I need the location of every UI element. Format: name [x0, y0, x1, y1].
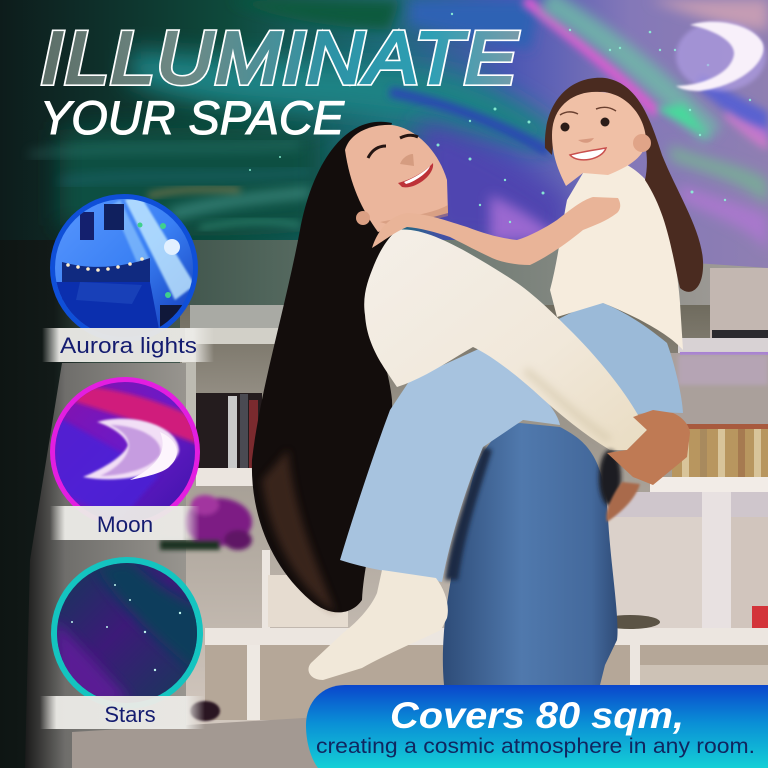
- label band: Stars: [40, 696, 205, 729]
- aurora ceiling: [0, 0, 768, 268]
- label: Moon: Moon: [97, 512, 153, 537]
- woman's hair brown tips: [262, 450, 335, 612]
- dark shadow by hand: [599, 450, 621, 506]
- woman's hand: [606, 410, 690, 522]
- label: Stars: Stars: [104, 702, 156, 727]
- title: ILLUMINATE: ILLUMINATE: [41, 18, 519, 99]
- icon: aurora room circle: [50, 194, 198, 328]
- icon: stars circle: [51, 557, 203, 696]
- woman's jeans: [443, 423, 618, 685]
- label band: Aurora lights: [42, 328, 214, 362]
- child's shirt: [550, 164, 683, 350]
- icon: moon circle: [50, 377, 200, 506]
- banner background: [306, 685, 768, 768]
- callout: coverage banner: [306, 685, 768, 768]
- child's face: [552, 92, 651, 186]
- woman's long hair: [252, 122, 395, 612]
- woman's face and neck: [345, 125, 448, 232]
- label: Aurora lights: Aurora lights: [60, 333, 197, 358]
- child's arm: [372, 197, 620, 265]
- banner subtext: creating a cosmic atmosphere in any room.: [316, 735, 755, 758]
- title: ILLUMINATE: ILLUMINATE: [41, 18, 519, 99]
- feature: stars: [40, 557, 205, 729]
- ceiling stars: [249, 13, 751, 223]
- sofa: [72, 717, 320, 768]
- child's jeans seat: [557, 303, 683, 415]
- books: dark row: [196, 393, 262, 468]
- feature: aurora lights: [42, 194, 214, 362]
- child's jeans leg: [340, 347, 560, 582]
- jeans shadow: [445, 447, 492, 580]
- left wall: [25, 363, 186, 768]
- flowers: [160, 495, 252, 550]
- books: tan row: [672, 424, 768, 477]
- banner heading: Covers 80 sqm,: [390, 695, 684, 736]
- bookshelf unit: [180, 268, 768, 730]
- moon in ceiling: [676, 21, 766, 91]
- small plant by stars label: [190, 701, 220, 721]
- child's sock: [308, 570, 448, 680]
- title: YOUR SPACE: YOUR SPACE: [40, 91, 345, 144]
- label band: Moon: [50, 506, 200, 540]
- child's hair: [545, 78, 703, 292]
- feature: moon: [50, 375, 200, 540]
- woman's sweater torso and arm: [364, 230, 647, 450]
